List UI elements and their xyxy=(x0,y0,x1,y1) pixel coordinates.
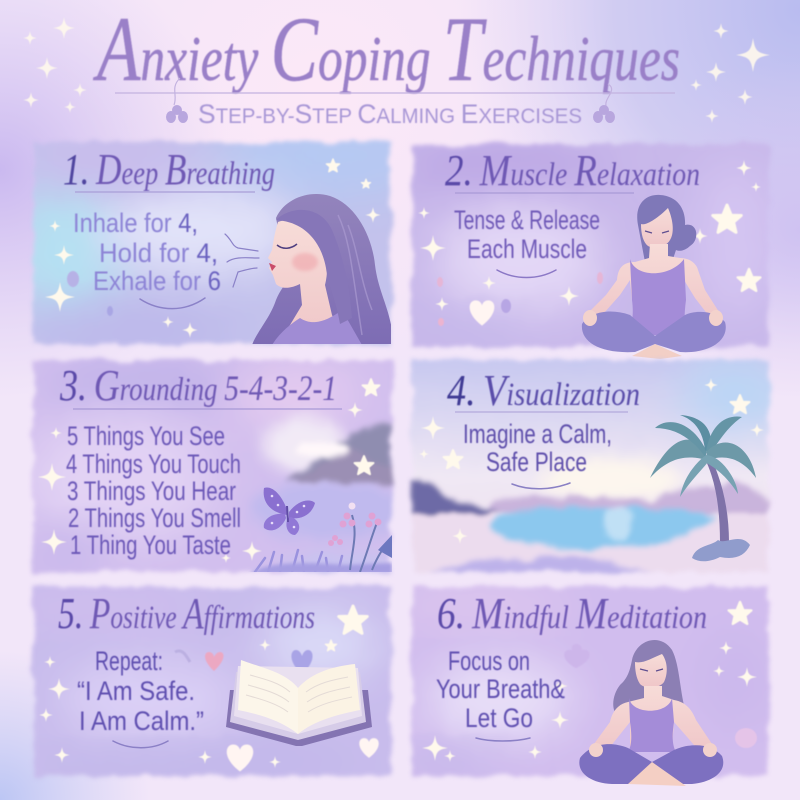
heading 5: 5. Positive Affirmations xyxy=(58,589,315,638)
title divider with vines xyxy=(115,78,675,106)
panel: visualization xyxy=(412,360,790,575)
heading 4 underline xyxy=(455,411,628,413)
heading 1: 1. Deep Breathing xyxy=(63,145,275,194)
heading 3: 3. Grounding 5-4-3-2-1 xyxy=(59,361,337,410)
relaxation instructions xyxy=(454,205,600,264)
panel 5 background xyxy=(0,587,391,776)
affirmation text xyxy=(77,646,204,736)
heading 6: 6. Mindful Meditation xyxy=(437,589,707,638)
heading 1 underline xyxy=(75,191,255,193)
panel: deep breathing xyxy=(5,110,440,352)
meditation instructions: Your Breath& xyxy=(436,674,565,704)
panel 1 sparkles xyxy=(45,159,381,338)
smile stroke xyxy=(497,270,556,278)
panel 3 lake and sky xyxy=(251,481,392,541)
icon: right flower ornament xyxy=(593,105,615,123)
panel 3 background xyxy=(25,360,410,579)
panel 2 background xyxy=(390,141,775,346)
relaxation instructions: Tense & Release xyxy=(454,205,600,235)
heading 2: 2. Muscle Relaxation xyxy=(445,146,700,195)
smile stroke xyxy=(476,738,530,741)
list of five senses: 3 Things You Hear xyxy=(67,476,236,506)
panel 6 sparkles xyxy=(422,602,757,762)
list of five senses: 2 Things You Smell xyxy=(68,503,241,533)
meditation instructions xyxy=(436,646,565,733)
illustration: woman seated cross-legged xyxy=(582,195,726,359)
affirmation text: I Am Calm.” xyxy=(79,706,204,736)
smile stroke xyxy=(512,483,570,489)
panel 6 background xyxy=(390,587,770,776)
list of five senses: 1 Thing You Taste xyxy=(70,530,231,560)
panel 4 distant hills xyxy=(490,480,770,515)
heading 3 underline xyxy=(73,408,342,410)
affirmation text: “I Am Safe. xyxy=(77,676,195,706)
breathing instructions: Inhale for 4, xyxy=(73,208,198,238)
meditation instructions: Focus on xyxy=(448,646,530,676)
panel: grounding xyxy=(25,360,410,579)
relaxation instructions: Each Muscle xyxy=(467,234,587,264)
breathing instructions: Exhale for 6 xyxy=(93,266,221,296)
illustration: woman in profile exhaling xyxy=(252,194,392,345)
illustration: woman meditating xyxy=(579,640,723,786)
title: Anxiety Coping Techniques xyxy=(92,0,680,100)
panel 5 sparkles and hearts xyxy=(39,606,379,772)
visualization instructions: Imagine a Calm, xyxy=(463,419,612,449)
illustration: open book xyxy=(226,660,372,746)
subtitle: STEP-BY-STEP CALMING EXERCISES xyxy=(198,99,582,129)
panel 4 sparkles xyxy=(419,378,764,544)
panel 2 sparkles and hearts xyxy=(418,160,761,326)
smile stroke and breath lines xyxy=(140,234,259,309)
list of five senses: 4 Things You Touch xyxy=(66,449,241,479)
icon: left flower ornament xyxy=(166,105,188,123)
visualization instructions xyxy=(463,419,612,477)
panel 3 sparkles xyxy=(38,379,380,563)
heading 2 underline xyxy=(455,192,634,194)
list of five senses: 5 Things You See xyxy=(67,421,225,451)
illustration: palm tree xyxy=(650,415,756,561)
icon: butterfly xyxy=(264,487,315,535)
background sparkles xyxy=(23,17,770,123)
visualization instructions: Safe Place xyxy=(486,447,587,477)
meditation instructions: Let Go xyxy=(465,703,533,733)
panel 4 background xyxy=(412,360,790,575)
panel: mindful meditation xyxy=(390,587,770,786)
list of five senses xyxy=(66,421,241,560)
panel 4 blue water xyxy=(490,507,718,548)
panel: muscle relaxation xyxy=(390,141,775,359)
panel: positive affirmations xyxy=(0,587,391,776)
smile stroke xyxy=(113,741,168,748)
panel 1 background xyxy=(30,138,396,348)
illustration: flowers and grass xyxy=(250,502,392,574)
affirmation text: Repeat: xyxy=(95,646,163,676)
breathing instructions: Hold for 4, xyxy=(99,238,218,268)
breathing instructions xyxy=(73,208,221,296)
heading 4: 4. Visualization xyxy=(447,366,640,415)
